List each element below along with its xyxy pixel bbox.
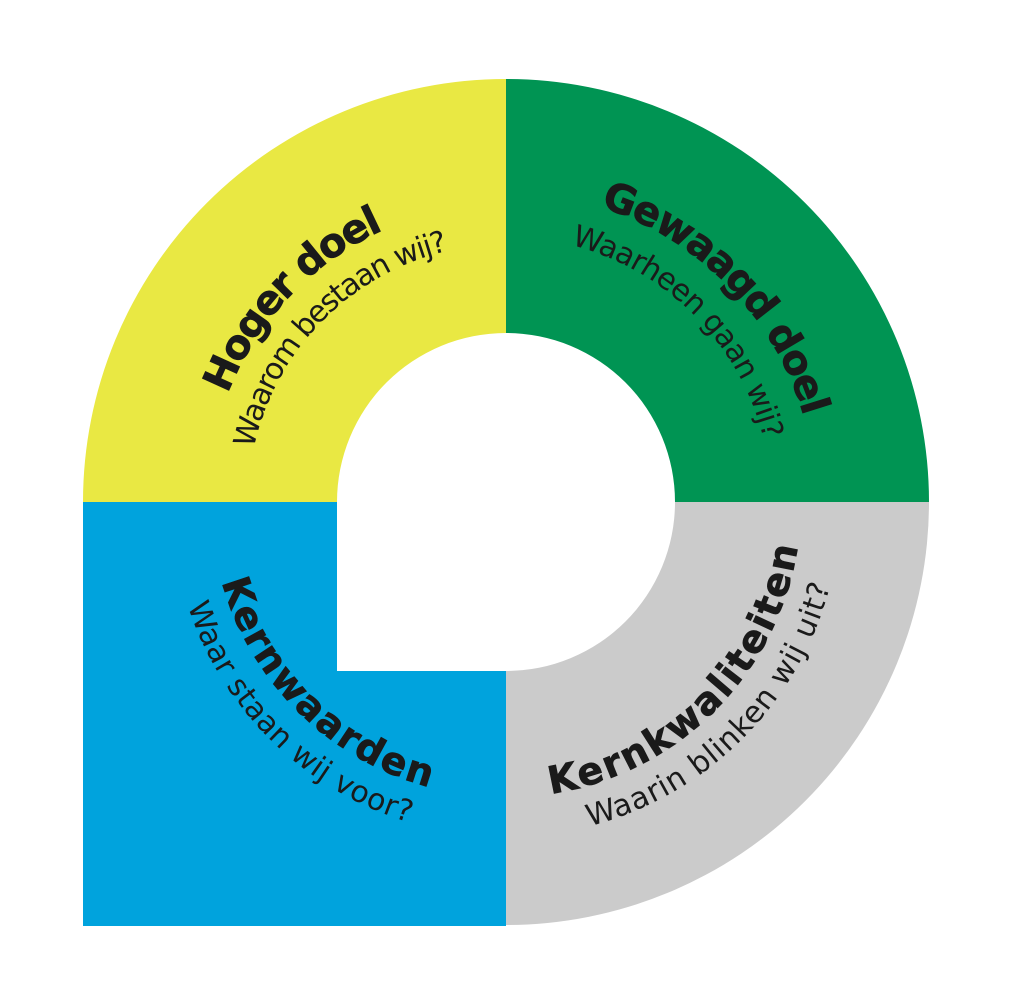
subtitle: Waarheen gaan wij?: Waarheen gaan wij? (577, 224, 784, 434)
heading: Hoger doel: Hoger doel (202, 203, 381, 391)
subtitle: Waarin blinken wij uit?: Waarin blinken wij uit? (584, 582, 828, 825)
panel: Hoger doel (83, 79, 506, 502)
heading: Kernkwaliteiten: Kernkwaliteiten (548, 546, 798, 794)
heading: Kernwaarden: Kernwaarden (222, 576, 432, 787)
panel: Kernwaarden (83, 502, 506, 926)
segment: green quadrant (506, 79, 929, 502)
subtitle: Waarom bestaan wij?: Waarom bestaan wij? (232, 230, 442, 442)
segment: blue quadrant (83, 502, 506, 926)
segment: grey quadrant (506, 502, 929, 925)
panel: Gewaagd doel (506, 79, 929, 502)
panel: Kernkwaliteiten (506, 502, 929, 925)
heading: Gewaagd doel: Gewaagd doel (606, 183, 832, 414)
segment: yellow quadrant (83, 79, 506, 502)
subtitle: Waar staan wij voor?: Waar staan wij voor? (190, 599, 413, 820)
